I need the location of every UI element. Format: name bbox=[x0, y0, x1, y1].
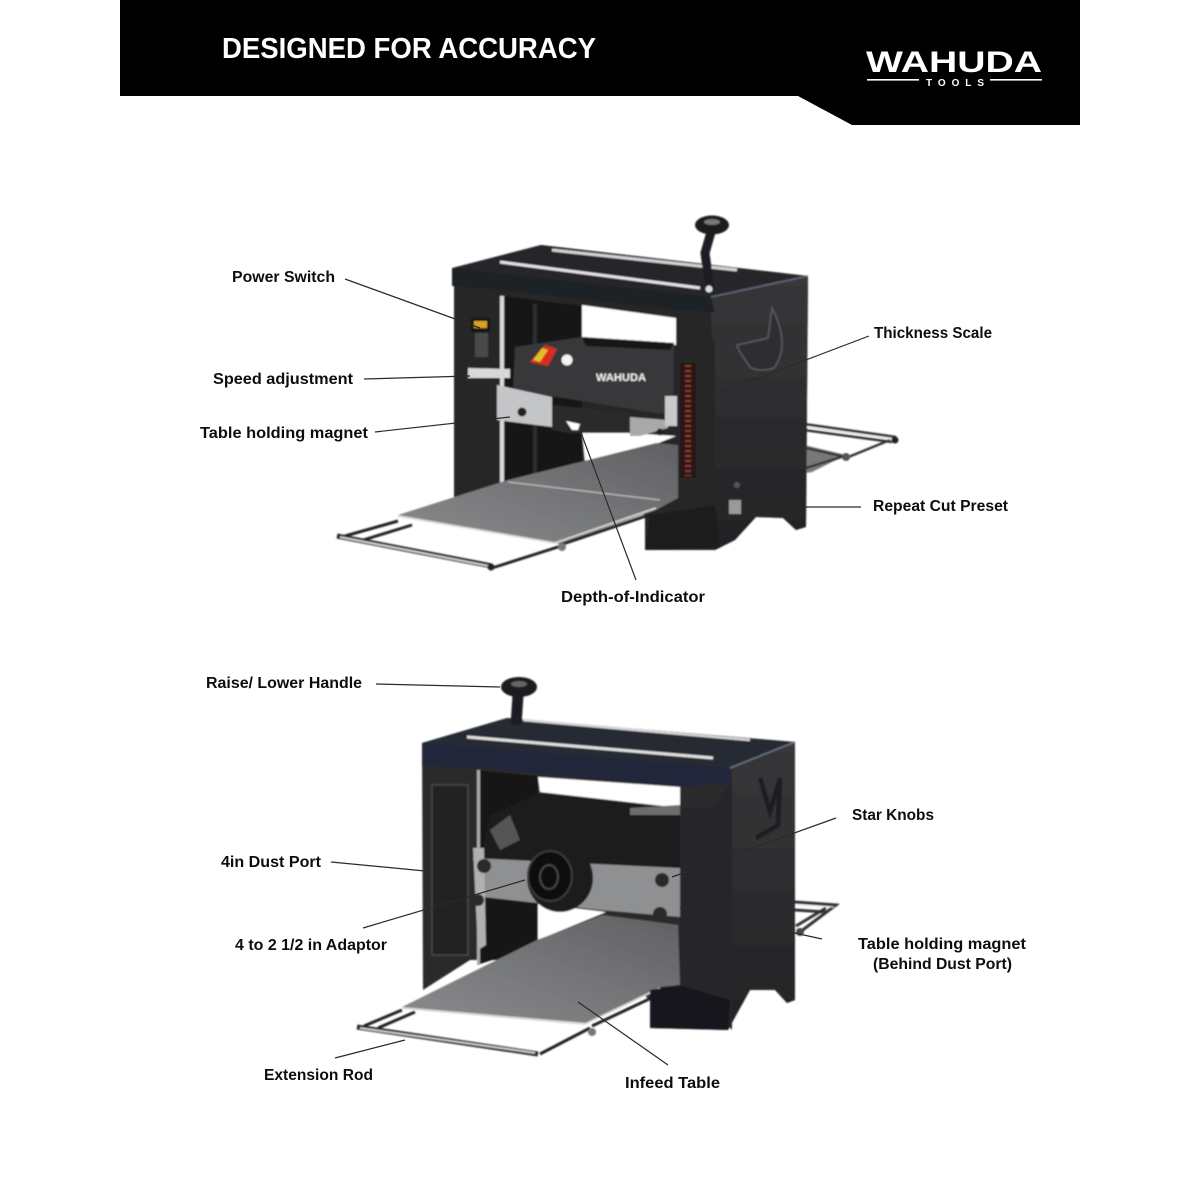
infeed table bbox=[398, 443, 678, 544]
logo: Wahuda Tools: WAHUDA bbox=[866, 46, 1042, 79]
base bbox=[645, 505, 720, 550]
interior and window bbox=[477, 770, 538, 965]
labels: bottom machine: Infeed Table bbox=[625, 1075, 720, 1092]
silver plate and depth indicator bbox=[468, 368, 677, 436]
title: DESIGNED FOR ACCURACY bbox=[222, 33, 596, 65]
raise handle bbox=[501, 677, 537, 725]
labels: bottom machine: Extension Rod bbox=[264, 1067, 373, 1084]
labels: top machine bbox=[200, 269, 1008, 606]
cutter head rear bbox=[480, 793, 680, 870]
side recess bbox=[737, 308, 782, 370]
labels: bottom machine: Table holding magnet bbox=[858, 936, 1026, 953]
logo: Wahuda Tools: TOOLS bbox=[926, 78, 984, 89]
illustration: planer rear view bbox=[357, 677, 836, 1054]
side panel bbox=[728, 742, 795, 1030]
left control panel bbox=[471, 318, 490, 357]
callout lines: bottom machine bbox=[331, 684, 836, 1065]
cutter head bbox=[513, 337, 674, 413]
logo: Wahuda Tools bbox=[866, 46, 1042, 89]
labels: bottom machine: Star Knobs bbox=[852, 807, 934, 824]
machine body bbox=[422, 718, 795, 1030]
infeed table bbox=[402, 915, 680, 1024]
labels: bottom machine: 4in Dust Port bbox=[221, 854, 321, 871]
illustration: planer front view bbox=[337, 216, 898, 570]
raise handle bbox=[695, 216, 729, 292]
dust port bbox=[527, 844, 593, 912]
right column with thickness scale bbox=[678, 328, 715, 505]
labels: bottom machine: Raise/ Lower Handle bbox=[206, 675, 362, 692]
labels: top machine: Repeat Cut Preset bbox=[873, 498, 1008, 515]
labels: top machine: Depth-of-Indicator bbox=[561, 589, 705, 606]
labels: top machine: Table holding magnet bbox=[200, 425, 368, 442]
top plate bbox=[422, 718, 795, 787]
side panel shading bbox=[711, 276, 808, 550]
labels: bottom machine: (Behind Dust Port) bbox=[873, 956, 1012, 973]
rear rods bbox=[795, 902, 836, 936]
star knobs bbox=[472, 859, 669, 921]
labels: top machine: Thickness Scale bbox=[874, 325, 992, 342]
header banner bbox=[120, 0, 1080, 125]
labels: top machine: Speed adjustment bbox=[213, 371, 353, 388]
left column panel bbox=[432, 785, 468, 955]
cutter head: WAHUDA bbox=[596, 372, 646, 384]
top plate bbox=[452, 245, 808, 312]
machine body bbox=[454, 245, 808, 550]
labels: bottom machine: 4 to 2 1/2 in Adaptor bbox=[235, 937, 387, 954]
base bbox=[650, 985, 730, 1030]
callout lines: top machine bbox=[345, 279, 869, 580]
rear table and rods bbox=[800, 424, 898, 474]
labels: top machine: Power Switch bbox=[232, 269, 335, 286]
extension rod bbox=[337, 514, 652, 570]
extension rod bbox=[357, 992, 664, 1054]
labels: bottom machine bbox=[206, 675, 1026, 1092]
silver bar bbox=[473, 858, 680, 917]
white gap under bar bbox=[538, 904, 606, 940]
white opening bbox=[582, 305, 676, 345]
silver post bbox=[473, 848, 486, 950]
repeat cut preset knob bbox=[729, 482, 741, 514]
right front column bbox=[680, 782, 732, 1030]
